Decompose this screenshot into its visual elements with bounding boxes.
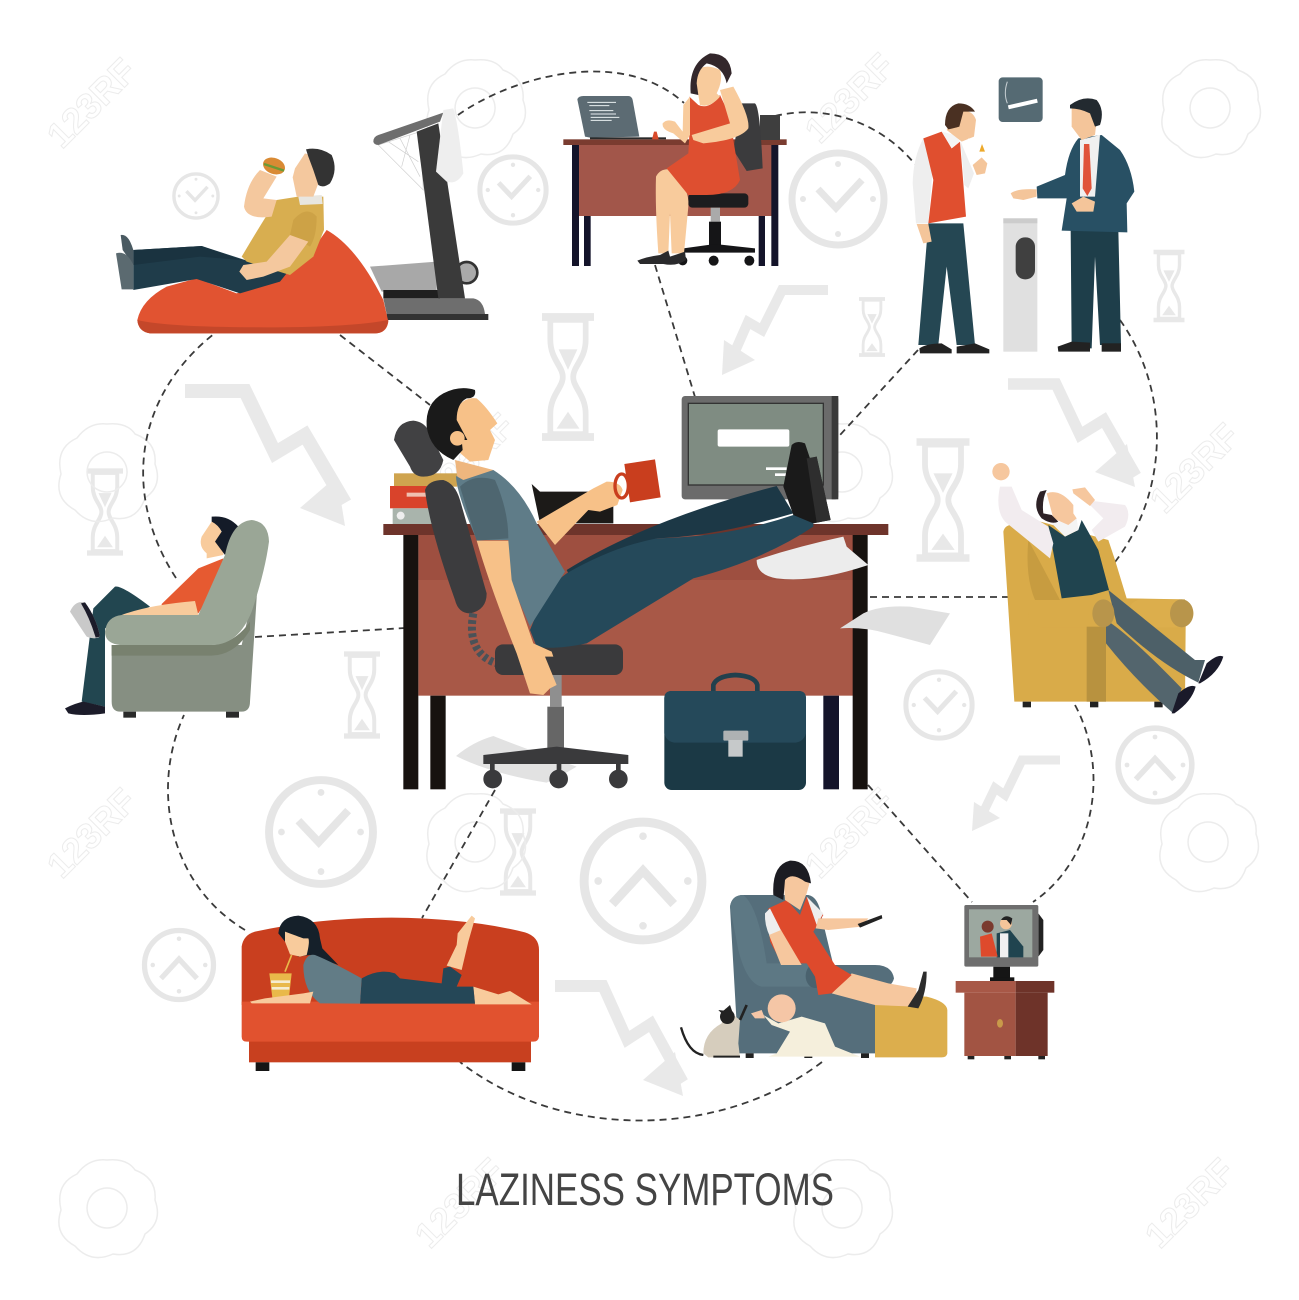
watermarks: 123RF	[39, 50, 144, 156]
dashed connector lines	[143, 72, 1157, 1120]
background trend arrows	[185, 290, 1136, 1096]
watermarks: 123RF	[797, 780, 902, 886]
colleague	[1011, 98, 1134, 352]
desk	[563, 139, 787, 266]
armchair	[1003, 518, 1193, 707]
symptom: woman with baby and cat watching television	[681, 861, 1054, 1059]
armchair	[730, 895, 894, 1058]
woman	[250, 916, 532, 1004]
treadmill	[370, 108, 488, 320]
man	[992, 463, 1223, 713]
legs	[82, 587, 150, 707]
ashtray	[1003, 218, 1037, 352]
woman	[765, 861, 927, 1008]
symptom: woman phoning at office desk	[563, 53, 787, 266]
ottoman	[875, 996, 947, 1057]
watermarks: 123RF	[797, 45, 902, 151]
symptom: man eating on beanbag beside treadmill	[116, 108, 488, 333]
monitor	[682, 396, 838, 499]
watermarks: 123RF	[1142, 415, 1247, 521]
smoker	[913, 103, 989, 353]
watermarks: 123RF	[407, 1150, 512, 1256]
sofa	[242, 918, 539, 1071]
title: LAZINESS SYMPTOMS	[456, 1164, 834, 1215]
symptom: woman lying on red sofa with drink	[242, 916, 539, 1071]
armchair cushion	[105, 520, 269, 645]
office chair	[394, 421, 628, 788]
watermarks: 123RF	[1137, 1150, 1242, 1256]
man	[65, 516, 238, 715]
floor paper	[456, 736, 577, 783]
armchair	[112, 572, 258, 718]
watermarks: 123RF	[39, 780, 144, 886]
man	[116, 149, 335, 293]
symptom: man yawning in yellow armchair	[992, 463, 1223, 713]
laptop	[577, 96, 666, 139]
beanbag	[137, 230, 388, 333]
woman	[637, 53, 748, 265]
background clock icons	[144, 153, 1192, 1000]
cat	[681, 1005, 747, 1057]
man's arm	[122, 601, 198, 615]
falling paper	[840, 606, 950, 645]
television stand	[956, 981, 1054, 1059]
drink	[269, 955, 292, 998]
television	[964, 905, 1043, 981]
symptom: man sitting in grey armchair	[65, 516, 269, 718]
office chair	[678, 103, 763, 266]
worker	[427, 388, 831, 695]
watermarks: 123RF	[417, 405, 522, 511]
symptom: men smoking	[913, 77, 1134, 353]
baby	[751, 994, 860, 1057]
central figure: lazy office worker at desk	[383, 388, 950, 790]
desk papers	[757, 537, 868, 579]
folders	[390, 473, 457, 524]
desk	[383, 524, 888, 789]
paper tray	[760, 115, 780, 140]
no-smoking sign	[999, 77, 1043, 122]
briefcase	[664, 675, 806, 790]
background hourglass icons	[87, 252, 1184, 893]
document tray	[532, 484, 613, 523]
